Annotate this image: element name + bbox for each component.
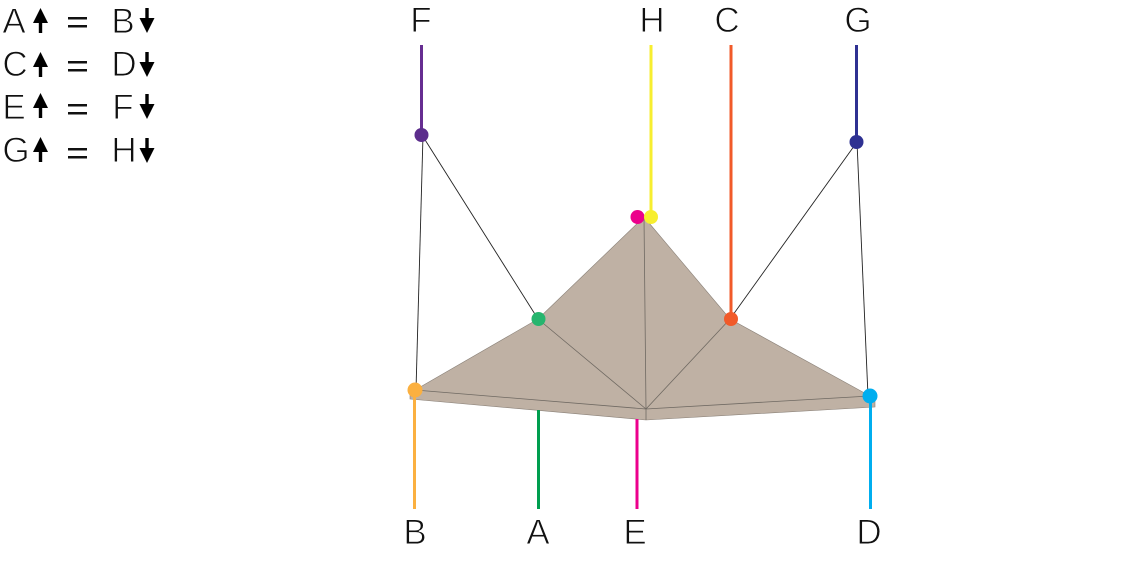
- line A: [537, 410, 540, 509]
- line E: [636, 419, 638, 509]
- dot B: [408, 382, 422, 398]
- label G: G: [844, 1, 872, 40]
- connecting threads: [416, 135, 868, 396]
- legend row: E up equals F down: F: [112, 88, 134, 127]
- line D: [869, 396, 872, 509]
- label A: A: [526, 513, 550, 552]
- legend: up and down equivalences: [2, 2, 154, 170]
- legend row: G up equals H down: [2, 131, 154, 170]
- dot E: [630, 210, 644, 224]
- legend row: C up equals D down: [2, 45, 154, 84]
- label H: H: [639, 1, 665, 40]
- dot A: [532, 312, 546, 326]
- line B: [413, 390, 416, 509]
- legend row: E up equals F down: E: [2, 88, 26, 127]
- legend row: C up equals D down: C: [2, 45, 28, 84]
- line F: [420, 45, 423, 135]
- dot D: [862, 388, 878, 404]
- folded paper shape: [410, 217, 875, 420]
- dot C: [724, 312, 738, 326]
- legend row: A up equals B down: [2, 2, 154, 41]
- label E: E: [623, 513, 647, 552]
- dot G: [850, 135, 864, 149]
- label B: B: [403, 513, 427, 552]
- legend row: A up equals B down: A: [2, 2, 26, 41]
- legend row: G up equals H down: G: [2, 131, 30, 170]
- dot F: [414, 128, 428, 142]
- line G: [855, 45, 858, 142]
- legend row: G up equals H down: H: [111, 131, 137, 170]
- legend row: A up equals B down: B: [111, 2, 135, 41]
- legend row: C up equals D down: D: [111, 45, 137, 84]
- line C: [730, 45, 732, 319]
- legend row: E up equals F down: [2, 88, 154, 127]
- line H: [650, 45, 652, 217]
- label C: C: [714, 1, 740, 40]
- paper body: [410, 217, 875, 420]
- label D: D: [856, 513, 882, 552]
- label F: F: [410, 1, 432, 40]
- fold lines: [415, 217, 870, 420]
- dot H: [644, 210, 658, 224]
